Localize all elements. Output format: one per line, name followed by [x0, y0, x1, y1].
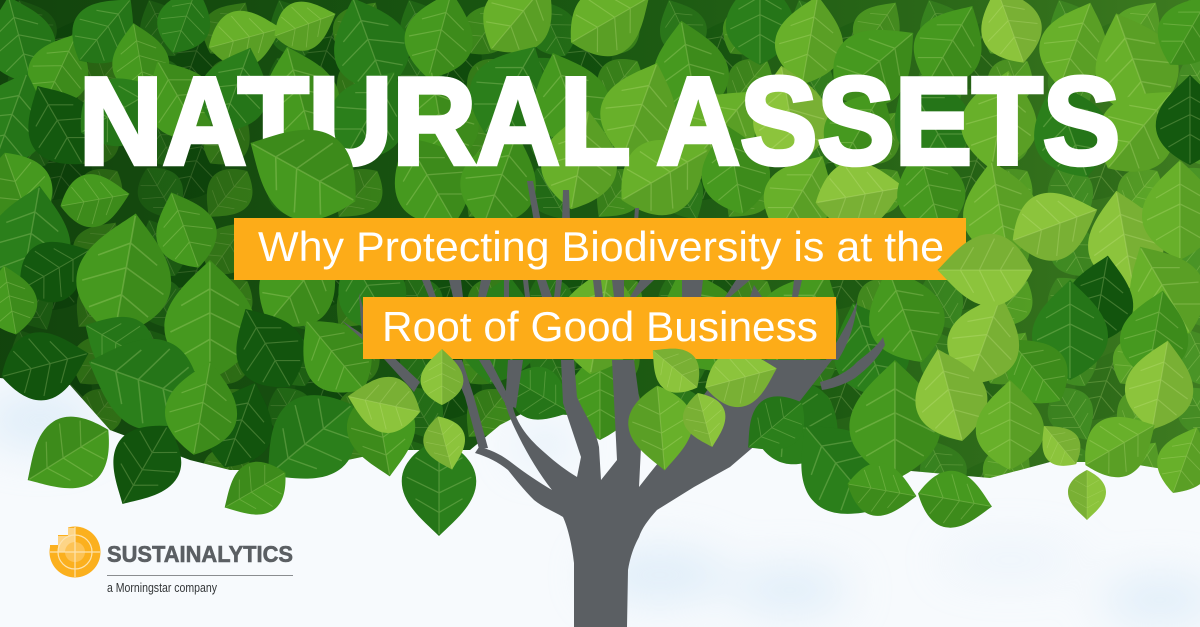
subtitle banner line 2: Root of Good Business	[382, 303, 818, 350]
subtitle banner line 2	[363, 297, 836, 359]
foreground leaves over tree	[342, 341, 819, 475]
icon: logo mark	[50, 526, 100, 578]
logo tagline: a Morningstar company	[107, 581, 218, 595]
logo wordmark: SUSTAINALYTICS	[107, 541, 293, 567]
subtitle banner line 1	[234, 218, 966, 280]
leaf overlapping title	[228, 103, 378, 241]
logo: Sustainalytics	[50, 526, 293, 595]
tree silhouette	[341, 181, 885, 627]
title: NATURAL ASSETS	[79, 52, 1120, 191]
leaf overlapping banner	[938, 234, 1032, 306]
subtitle banner line 1: Why Protecting Biodiversity is at the	[258, 223, 944, 270]
small leaves overlapping banner 2	[421, 333, 711, 405]
